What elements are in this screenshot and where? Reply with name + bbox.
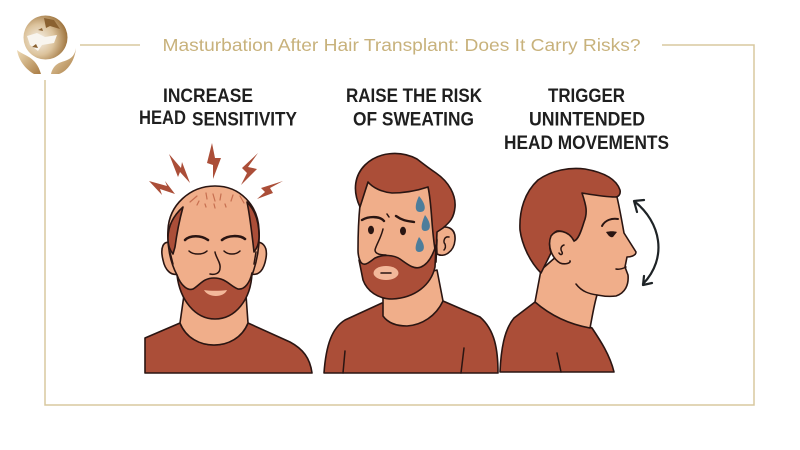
shirt	[145, 323, 312, 373]
arrow: up and down motion	[634, 200, 658, 285]
neck and face	[535, 193, 636, 328]
logo: globe in hands	[17, 16, 76, 74]
neck	[383, 270, 443, 326]
ear	[436, 227, 455, 255]
figure 2: sweating man	[324, 153, 498, 373]
title: Masturbation After Hair Transplant: Does It Carry Risks?	[162, 35, 641, 55]
hair	[355, 153, 455, 255]
side hair	[168, 207, 183, 254]
face	[358, 182, 437, 295]
shirt	[500, 302, 614, 372]
beard	[177, 273, 252, 319]
decorative frame	[45, 45, 754, 405]
hair	[520, 168, 620, 273]
heading: trigger unintended head movements: TRIGGER	[548, 86, 625, 107]
icon: sweat drops	[416, 196, 430, 252]
mouth	[204, 290, 227, 296]
ear	[550, 231, 574, 264]
icon: lightning bolts	[149, 143, 283, 199]
heading: raise the risk of sweating: RAISE THE RISK	[346, 86, 482, 107]
beard	[359, 245, 436, 299]
heading: trigger unintended head movements	[504, 86, 669, 154]
heading: increase head sensitivity: SENSITIVITY	[192, 110, 297, 130]
heading: raise the risk of sweating	[346, 86, 482, 130]
heading: increase head sensitivity: INCREASE	[163, 86, 253, 107]
heading: raise the risk of sweating: OF SWEATING	[353, 110, 474, 130]
scalp hairs	[190, 193, 244, 208]
face lines	[185, 236, 245, 240]
head	[168, 186, 259, 318]
heading: trigger unintended head movements: UNINTENDED	[529, 110, 645, 130]
heading: trigger unintended head movements: HEAD MOVEMENTS	[504, 133, 669, 154]
face features	[602, 219, 618, 226]
heading: increase head sensitivity	[139, 86, 297, 130]
figure 1: man with sensitive scalp	[145, 143, 312, 373]
mouth	[374, 266, 398, 280]
ears	[162, 242, 178, 274]
face features	[362, 216, 414, 222]
neck	[180, 295, 248, 345]
figure 3: man in profile	[500, 168, 658, 372]
shirt	[324, 301, 498, 373]
heading: increase head sensitivity: HEAD	[139, 108, 186, 129]
